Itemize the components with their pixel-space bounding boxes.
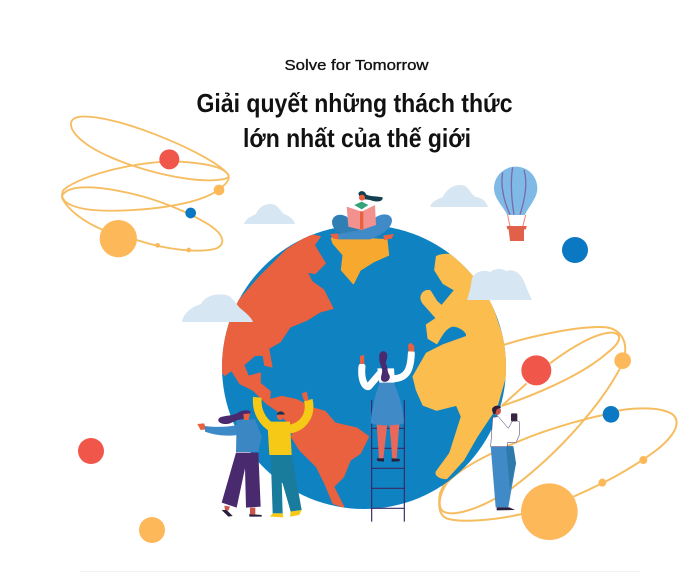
free red planet [78, 438, 104, 464]
cloud left of globe [182, 294, 253, 322]
title line two: lớn nhất của thế giới [243, 123, 471, 153]
face [243, 413, 250, 420]
globe [217, 225, 510, 509]
trousers [271, 454, 302, 513]
hair [492, 406, 501, 414]
ocean [222, 225, 506, 509]
planets [100, 149, 224, 257]
envelope stripes [502, 167, 526, 215]
cloud upper right [430, 185, 488, 207]
cloud over globe right [467, 269, 532, 300]
shirt body [377, 368, 395, 383]
jacket arms [257, 397, 309, 429]
hair [218, 410, 251, 424]
legs [377, 424, 399, 458]
heading block [196, 57, 512, 153]
hands [360, 343, 414, 364]
legs [332, 215, 370, 237]
hair [277, 411, 285, 415]
hair [358, 191, 383, 201]
shoes [377, 458, 400, 462]
dress [371, 382, 404, 425]
shirt arms [362, 353, 411, 387]
shoe [497, 507, 515, 510]
head [492, 406, 501, 415]
orbit lines [439, 327, 677, 521]
book [347, 205, 376, 230]
americas [217, 235, 368, 507]
woman on ladder [360, 343, 414, 522]
shirt [491, 417, 519, 447]
sweater [236, 419, 262, 452]
brand line: Solve for Tomorrow [284, 57, 429, 74]
trousers [491, 446, 516, 507]
continents [217, 235, 510, 507]
eurasia and africa [413, 255, 510, 478]
planets [521, 352, 647, 540]
ladder [372, 400, 404, 522]
hand [197, 423, 207, 430]
infographic canvas [60, 58, 678, 572]
ropes [508, 215, 526, 227]
right planetary orbits [439, 327, 677, 540]
jacket body [267, 422, 292, 455]
trousers [222, 453, 261, 508]
hand [302, 392, 309, 401]
envelope [494, 167, 537, 215]
free blue planet [562, 237, 588, 263]
phone [511, 413, 517, 421]
orbit lines [62, 116, 229, 251]
person with blue sweater [197, 410, 262, 517]
cloud above globe left [244, 204, 295, 224]
head and braid [379, 351, 390, 382]
india [332, 237, 388, 283]
face [359, 195, 365, 201]
basket [507, 226, 527, 241]
title line one: Giải quyết những thách thức [196, 88, 512, 118]
person reading on globe [330, 191, 394, 240]
shoes [270, 510, 302, 517]
head [277, 413, 284, 420]
person in yellow jacket [257, 392, 309, 517]
feet [330, 233, 394, 240]
feet [222, 510, 262, 517]
man with phone [491, 406, 519, 510]
free yellow planet [139, 517, 165, 543]
arm [205, 425, 237, 436]
hot air balloon [494, 167, 537, 241]
left planetary orbits [62, 116, 229, 257]
